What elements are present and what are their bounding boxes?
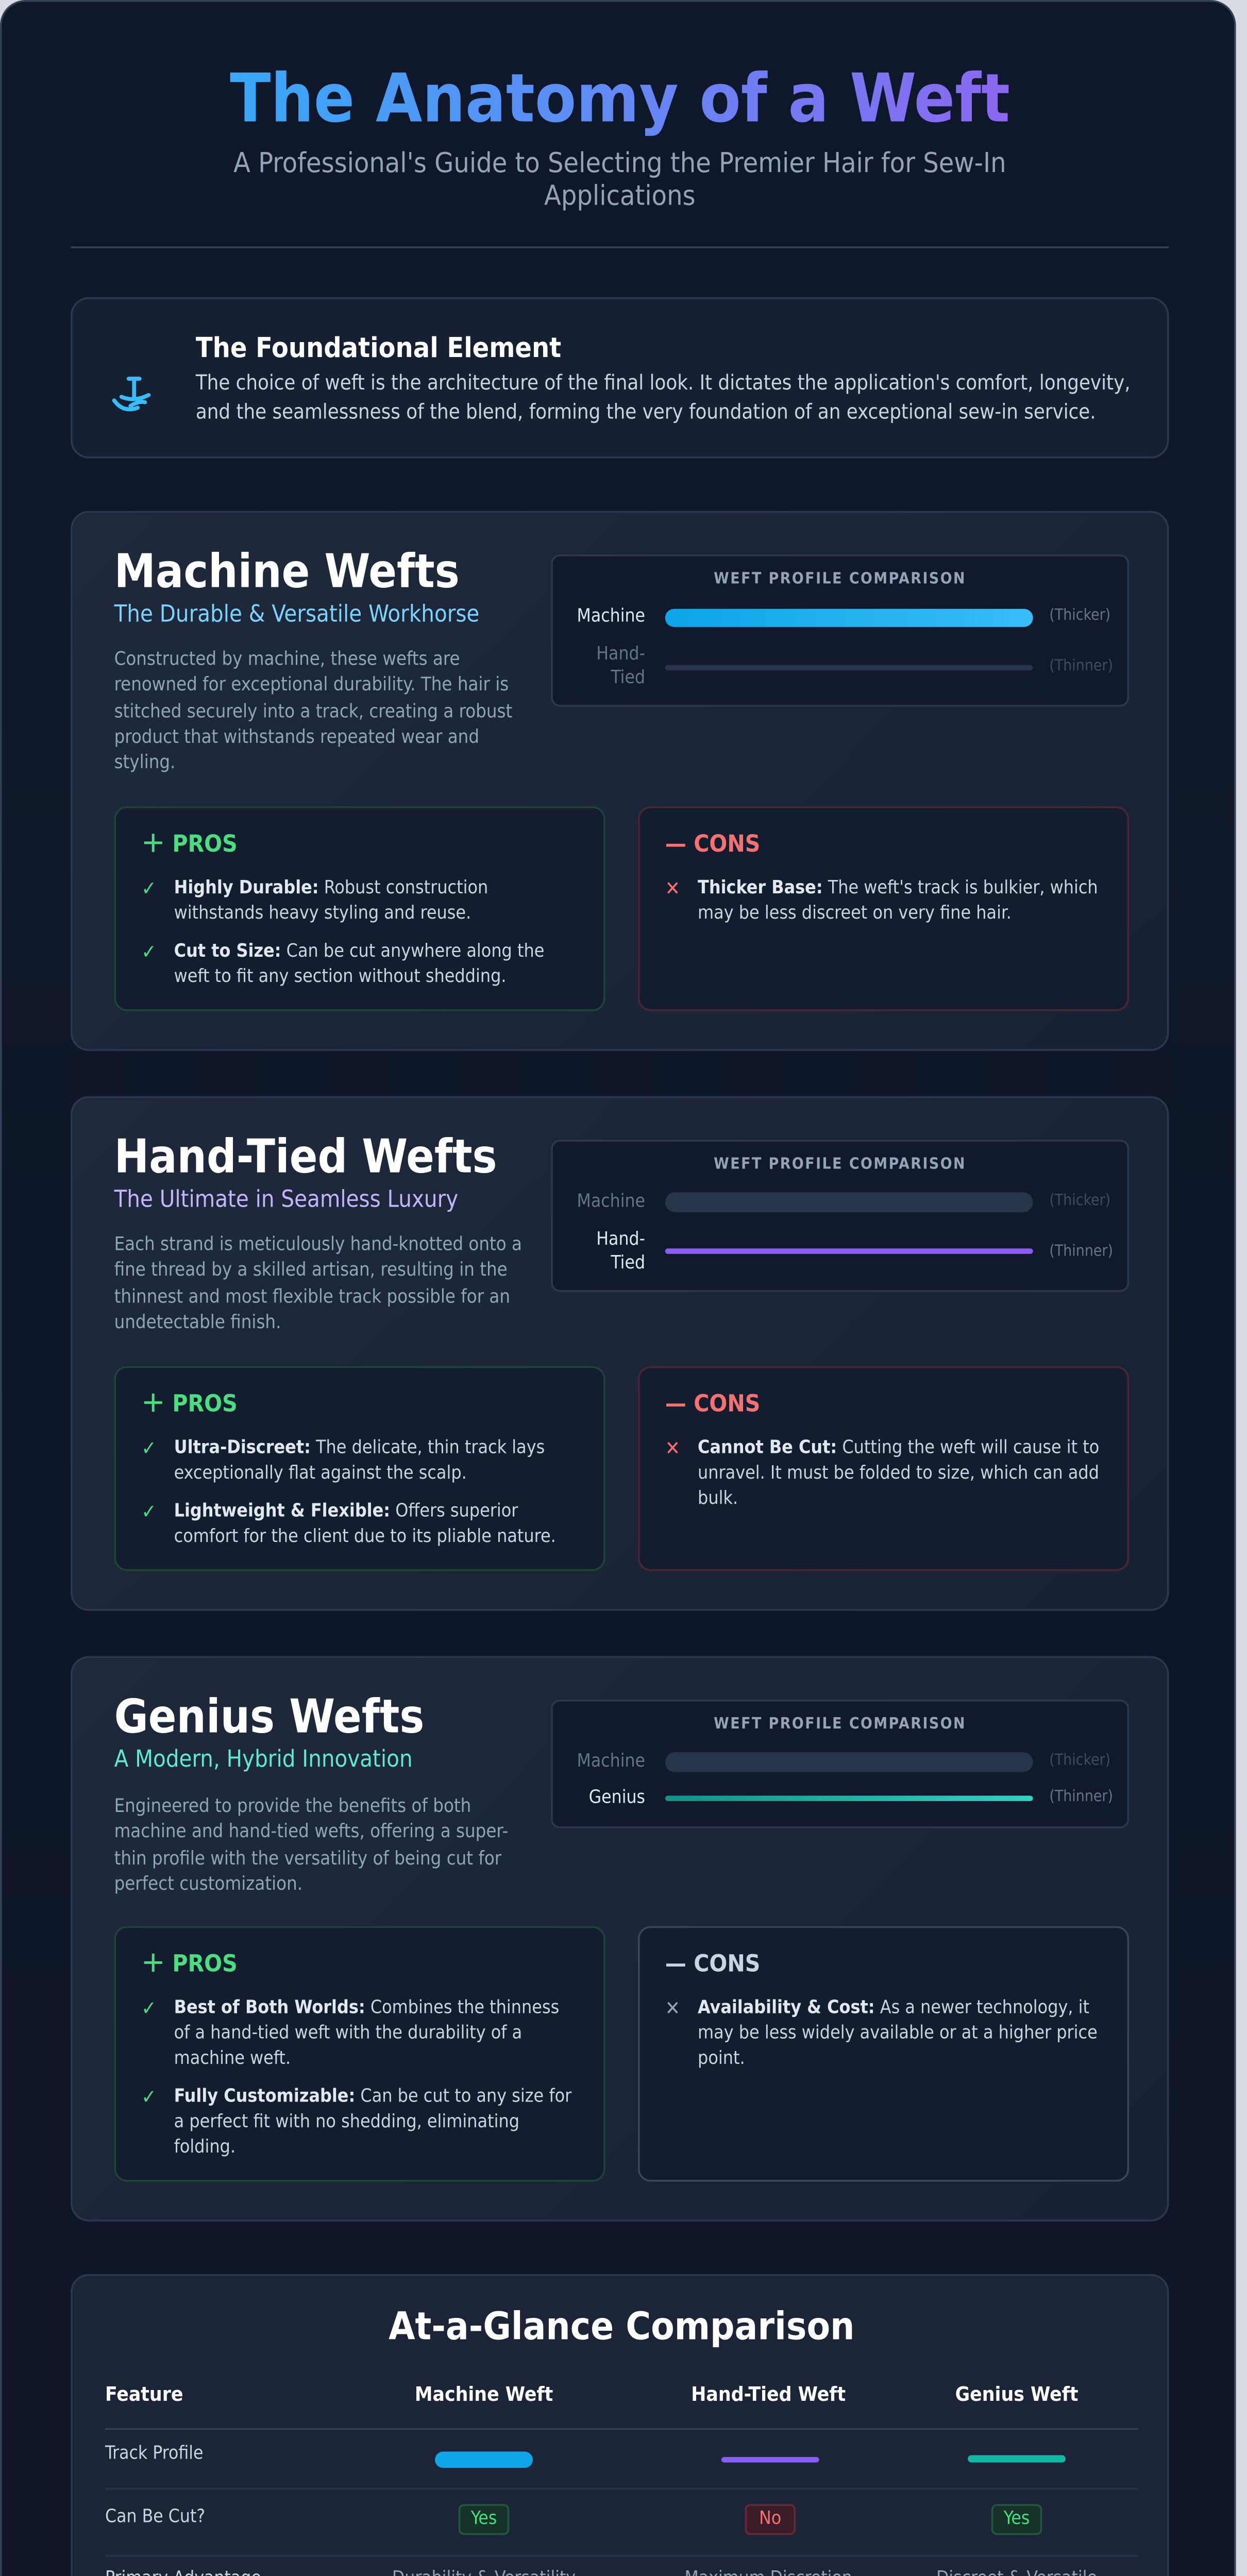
title: The Anatomy of a Weft [230,60,1010,138]
description: Constructed by machine, these wefts are renowned for exceptional durability. The hair is stitched securely into a track, creating a robust product that withstands repeated wear and styling. [114,649,512,774]
pros box: Ultra-Discreet: The delicate, thin track lays exceptionally flat against the scalp. [174,1438,545,1484]
chart: weft profile: (Thicker) [1049,607,1110,625]
cons box [638,1926,1129,2181]
cons box [638,1366,1129,1571]
chart: weft profile: Tied [611,1254,645,1274]
panel: genius wefts [71,1656,1169,2222]
panel: comparison table [71,2274,1169,2576]
pros box: ＋ PROS [141,1952,238,1979]
panel: machine wefts [71,511,1169,1051]
heading: Genius Wefts [114,1690,424,1745]
pros box [114,1366,605,1571]
chart: weft profile: Machine [577,1192,645,1212]
table header: Genius Weft [955,2383,1079,2406]
row: can be cut: Yes [471,2510,497,2530]
chart: weft profile [551,1140,1129,1292]
chart: weft profile: (Thinner) [1049,1243,1113,1261]
chart: weft profile: Hand- [596,1230,645,1250]
heading: Hand-Tied Wefts [114,1131,497,1185]
pros box: ＋ PROS [141,1392,238,1419]
pros box: ＋ PROS [141,832,238,859]
description: Engineered to provide the benefits of both machine and hand-tied wefts, offering a super-thin profile with the versatility of being cut for perfect customization. [114,1795,508,1895]
chart: weft profile [551,1700,1129,1828]
chart: weft profile: (Thinner) [1049,658,1113,676]
table header: Hand-Tied Weft [691,2383,846,2406]
pros box: ✓ [141,2086,157,2109]
cons box: — CONS [665,1392,760,1419]
panel: hand-tied wefts [71,1096,1169,1611]
cons box: Thicker Base: The weft's track is bulkier, which may be less discreet on very fine hair. [698,879,1098,924]
pros box: ✓ [141,877,157,901]
cons box: Availability & Cost: As a newer technology, it may be less widely available or at a higher price point. [698,1998,1098,2069]
table header [105,2383,1079,2406]
chart: weft profile: WEFT PROFILE COMPARISON [714,1156,966,1174]
chart: weft profile: Tied [611,669,645,688]
subheading: A Modern, Hybrid Innovation [114,1747,413,1774]
pros box [114,1926,605,2181]
chart: weft profile: (Thicker) [1049,1192,1110,1210]
chart: weft profile: (Thinner) [1049,1788,1113,1806]
subtitle: A Professional's Guide to Selecting the Premier Hair for Sew-In Applications [233,147,1006,212]
pros box: ✓ [141,1500,157,1524]
row: can be cut: Can Be Cut? [105,2508,205,2528]
chart: weft profile: WEFT PROFILE COMPARISON [714,571,966,589]
icon: needle [112,377,150,411]
row: can be cut [105,2504,1042,2535]
cons box: — CONS [665,1952,760,1979]
table header: Machine Weft [415,2383,553,2406]
row: can be cut: Yes [1004,2510,1030,2530]
text: The choice of weft is the architecture of the final look. It dictates the application's comfort, longevity, and the seamlessness of the blend, forming the very foundation of an exceptional sew-in service. [196,371,1131,423]
row: track profile [105,2444,1066,2468]
chart: weft profile: Genius [589,1788,645,1808]
cons box: — CONS [665,832,760,859]
row: primary advantage [105,2569,1097,2576]
heading: The Foundational Element [196,332,561,364]
pros box: Lightweight & Flexible: Offers superior comfort for the client due to its pliable nature. [174,1502,556,1548]
description: Each strand is meticulously hand-knotted onto a fine thread by a skilled artisan, resulting in the thinnest and most flexible track possible for an undetectable finish. [114,1234,522,1333]
subheading: The Ultimate in Seamless Luxury [114,1187,458,1214]
chart: weft profile: (Thicker) [1049,1752,1110,1770]
pros box: Highly Durable: Robust construction withstands heavy styling and reuse. [174,879,488,924]
heading: At-a-Glance Comparison [389,2305,854,2348]
row: can be cut: No [759,2510,781,2530]
cons box: ✕ [665,877,680,901]
pros box: ✓ [141,940,157,964]
cons box: Cannot Be Cut: Cutting the weft will cause it to unravel. It must be folded to size, which can add bulk. [698,1438,1099,1510]
chart: weft profile: Machine [577,607,645,627]
subheading: The Durable & Versatile Workhorse [114,602,479,629]
cons box [638,806,1129,1011]
chart: weft profile [551,554,1129,707]
heading: Machine Wefts [114,546,460,600]
cons box: ✕ [665,1997,680,2020]
pros box: ✓ [141,1437,157,1461]
row: track profile: Track Profile [105,2444,204,2464]
chart: weft profile: Machine [577,1752,645,1772]
pros box [114,806,605,1011]
cons box: ✕ [665,1437,680,1461]
chart: weft profile: Hand- [596,645,645,665]
chart: weft profile: WEFT PROFILE COMPARISON [714,1716,966,1734]
pros box: ✓ [141,1997,157,2020]
pros box: Cut to Size: Can be cut anywhere along the weft to fit any section without shedding. [174,942,544,988]
panel: foundational element [71,297,1169,459]
pros box: Best of Both Worlds: Combines the thinness of a hand-tied weft with the durability of a machine weft. [174,1998,559,2069]
table header: Feature [105,2383,183,2406]
pros box: Fully Customizable: Can be cut to any size for a perfect fit with no shedding, eliminating folding. [174,2088,571,2158]
